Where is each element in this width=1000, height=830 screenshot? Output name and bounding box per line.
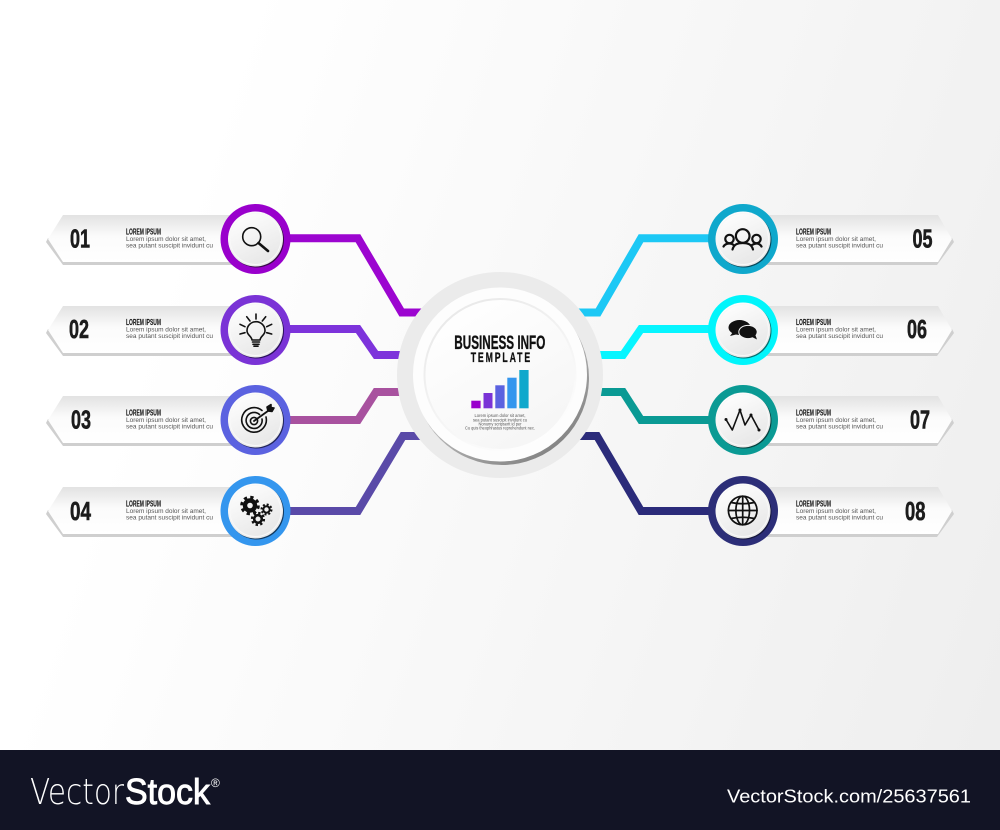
connector 08 [578, 436, 715, 511]
item 03 [46, 385, 290, 455]
item 07 [708, 385, 954, 455]
logo [30, 771, 220, 813]
text 02: sea putant suscipit invidunt cu [126, 333, 214, 340]
icon: globe [728, 496, 757, 525]
logo: ® [211, 776, 220, 790]
bar chart [471, 370, 529, 408]
text 02: LOREM IPSUM [126, 317, 161, 327]
text 05: sea putant suscipit invidunt cu [796, 242, 884, 249]
number 04: 04 [70, 496, 91, 526]
central circle [397, 272, 603, 478]
text 03: LOREM IPSUM [126, 407, 161, 417]
text 01: LOREM IPSUM [126, 226, 161, 236]
text 08: LOREM IPSUM [796, 498, 831, 508]
text 07: LOREM IPSUM [796, 407, 831, 417]
text 04 [126, 498, 214, 521]
text 01: Lorem ipsum dolor sit amet, [126, 236, 206, 243]
number 07: 07 [910, 404, 930, 434]
center caption: sea putant suscipit invidunt cu [473, 417, 528, 422]
text 05 [796, 226, 884, 249]
text 04: LOREM IPSUM [126, 498, 161, 508]
connector 04 [285, 436, 422, 511]
connector 06 [598, 329, 715, 355]
text 04: sea putant suscipit invidunt cu [126, 514, 214, 521]
image id: VectorStock.com/25637561 [727, 786, 971, 807]
text 06: LOREM IPSUM [796, 317, 831, 327]
center caption: Nonumy scripserit id per [478, 422, 522, 426]
center caption: Lorem ipsum dolor sit amet, [474, 413, 526, 418]
text 02: Lorem ipsum dolor sit amet, [126, 327, 206, 334]
text 01: sea putant suscipit invidunt cu [126, 242, 214, 249]
item 08 [708, 476, 954, 546]
logo: Stock [125, 771, 211, 812]
number 06: 06 [907, 314, 927, 344]
text 02 [126, 317, 214, 340]
icon: zigzag line [724, 408, 760, 432]
number 05: 05 [912, 224, 932, 254]
number 03: 03 [71, 404, 91, 434]
text 05: LOREM IPSUM [796, 226, 831, 236]
text 08 [796, 498, 884, 521]
text 07: Lorem ipsum dolor sit amet, [796, 417, 876, 424]
connector 01 [285, 238, 422, 312]
center caption [465, 413, 535, 431]
item 04 [46, 476, 290, 546]
item 05 [708, 204, 954, 274]
text 07 [796, 407, 884, 430]
connector 03 [285, 392, 402, 420]
text 03 [126, 407, 214, 430]
number 01: 01 [70, 224, 90, 254]
icon: target [242, 404, 274, 432]
number 02: 02 [69, 314, 89, 344]
center caption: Cu quis theophrastus reprehendunt nec. [465, 426, 535, 431]
item 06 [708, 295, 954, 365]
item 01 [46, 204, 290, 274]
connector lines [285, 238, 715, 511]
text 06: Lorem ipsum dolor sit amet, [796, 327, 876, 334]
number 08: 08 [905, 496, 926, 526]
text 03: sea putant suscipit invidunt cu [126, 423, 214, 430]
text 05: Lorem ipsum dolor sit amet, [796, 236, 876, 243]
connector 05 [578, 238, 715, 312]
title: BUSINESS INFO [454, 332, 545, 354]
footer bar [0, 750, 1000, 830]
icon: people [724, 229, 762, 250]
item 02 [46, 295, 290, 365]
text 03: Lorem ipsum dolor sit amet, [126, 417, 206, 424]
text 04: Lorem ipsum dolor sit amet, [126, 508, 206, 515]
text 08: Lorem ipsum dolor sit amet, [796, 508, 876, 515]
connector 07 [598, 392, 715, 420]
text 06 [796, 317, 884, 340]
icon: magnifier [243, 228, 268, 251]
icon: light bulb [240, 314, 272, 346]
icon: chat bubbles [728, 320, 757, 340]
text 06: sea putant suscipit invidunt cu [796, 333, 884, 340]
text 07: sea putant suscipit invidunt cu [796, 423, 884, 430]
text 08: sea putant suscipit invidunt cu [796, 514, 884, 521]
icon: gears [242, 497, 272, 525]
logo: Vector [30, 772, 124, 813]
connector 02 [285, 329, 402, 355]
subtitle: TEMPLATE [471, 351, 530, 366]
text 01 [126, 226, 214, 249]
